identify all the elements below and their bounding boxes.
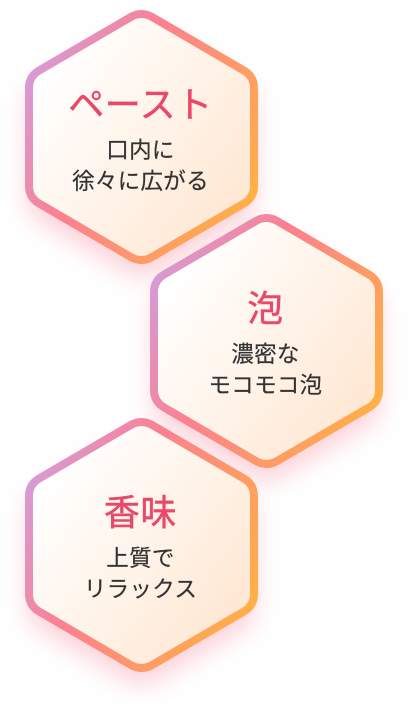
hexagon 1: paste (29, 14, 254, 276)
hexagon 3: flavor (29, 422, 254, 684)
text: premium relaxation: リラックス (84, 577, 197, 602)
text: spreads in the mouth: 徐々に広がる (72, 169, 209, 194)
heading: paste: ペースト (68, 84, 213, 125)
heading: flavor: 香味 (104, 492, 177, 533)
text: dense fluffy foam: モコモコ泡 (208, 373, 323, 398)
heading: foam: 泡 (247, 288, 284, 329)
hexagon 3 shape (29, 422, 254, 668)
text: spreads in the mouth: 口内に (106, 138, 175, 163)
hexagon 2: foam (154, 218, 379, 480)
hexagon 2 shape (154, 218, 379, 464)
text: premium relaxation: 上質で (106, 546, 175, 571)
hexagon 1 shape (29, 14, 254, 260)
text: dense fluffy foam: 濃密な (231, 342, 300, 367)
